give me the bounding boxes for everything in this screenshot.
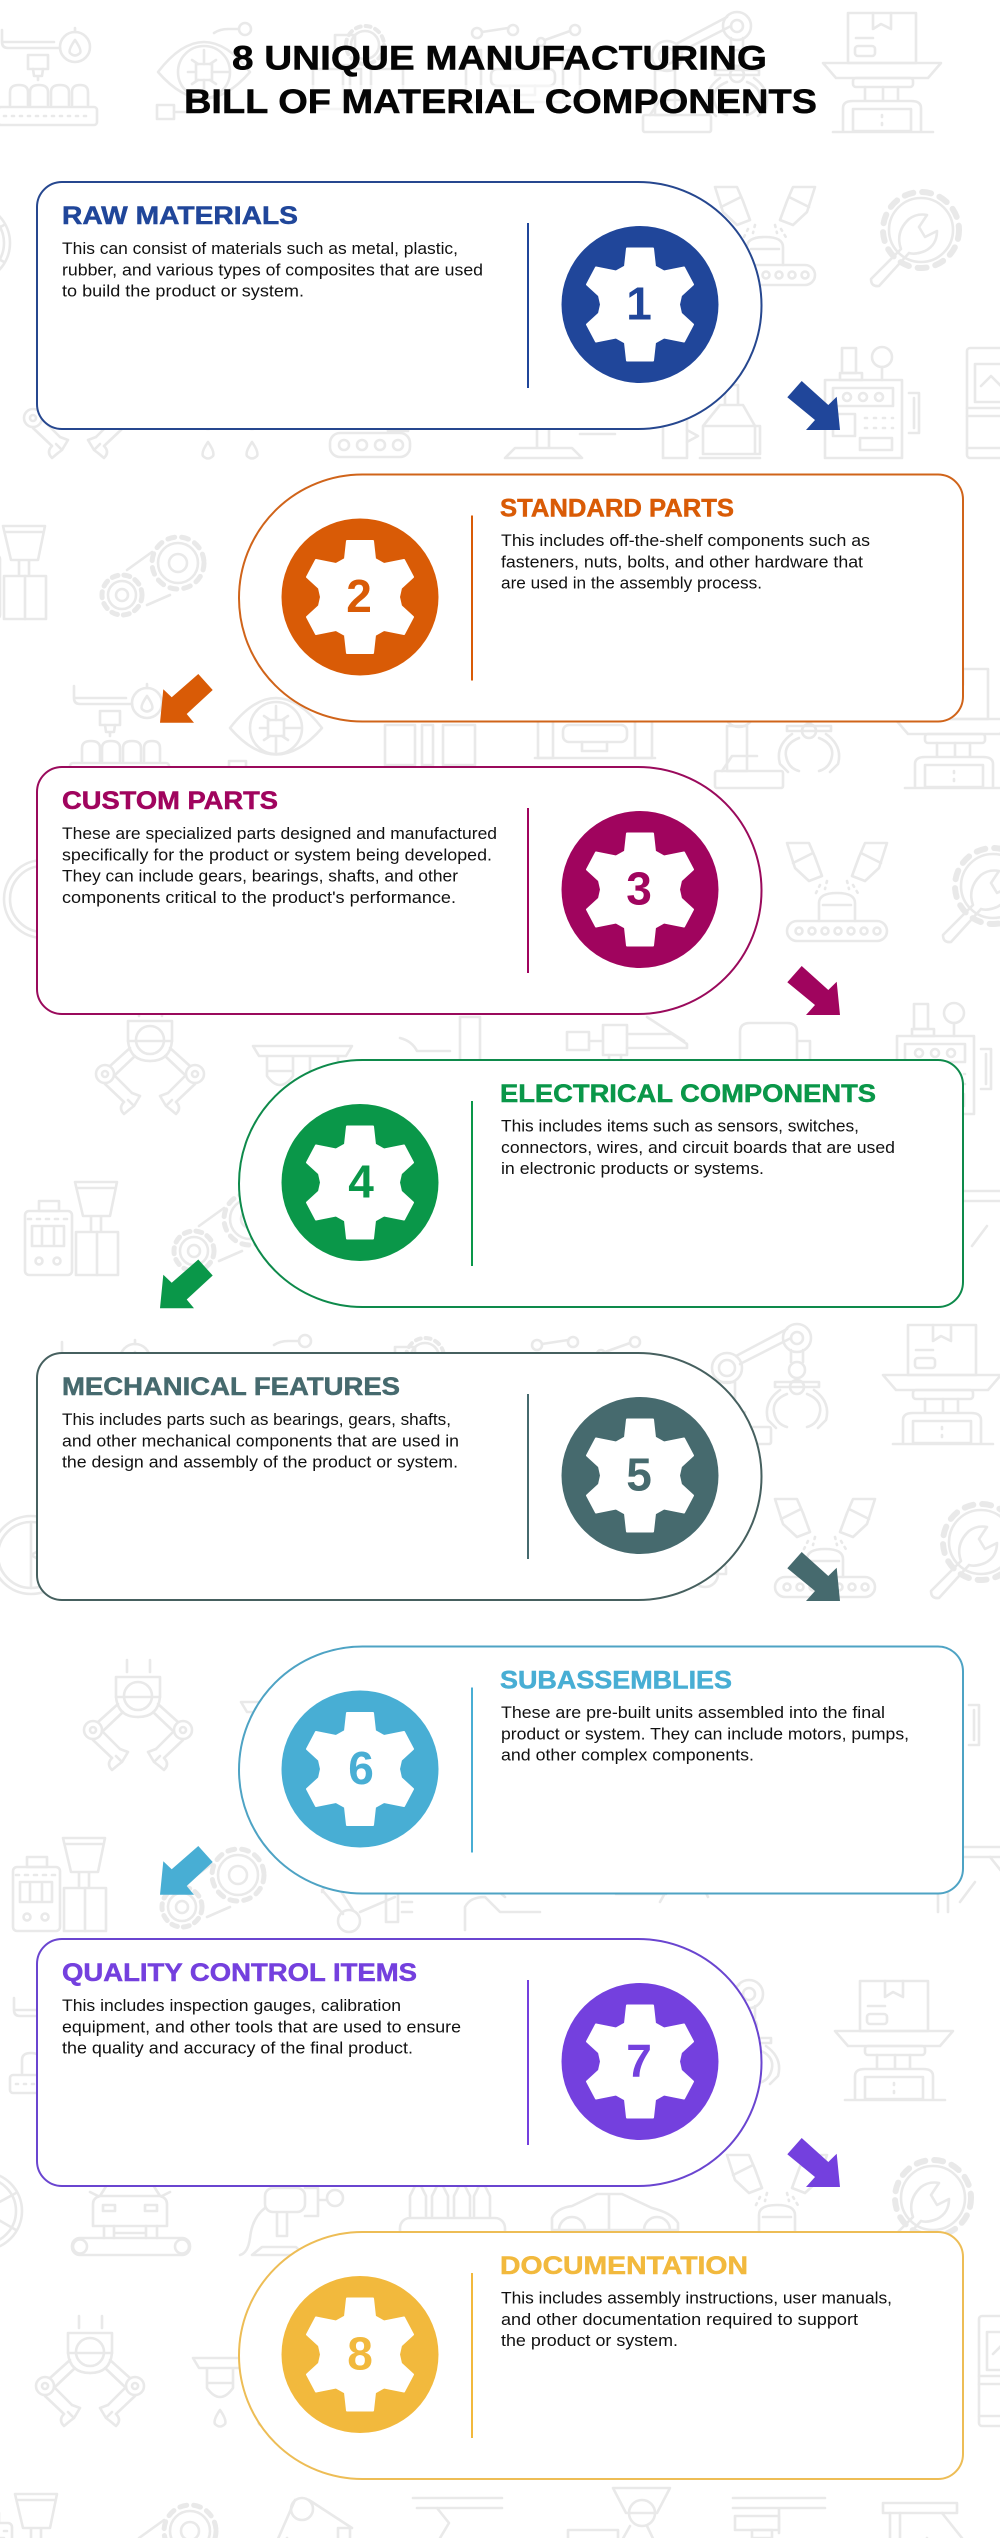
title <box>184 40 817 121</box>
text block: equipment, and other tools that are used to ensure <box>62 2018 461 2036</box>
icon: gear 3 <box>562 811 718 968</box>
icon: gear 8 <box>282 2276 438 2433</box>
text block: specifically for the product or system being developed. <box>62 846 492 864</box>
heading: CUSTOM PARTS <box>62 787 278 815</box>
heading: STANDARD PARTS <box>500 494 734 522</box>
icon: gear 2: 2 <box>346 570 372 622</box>
text block: and other documentation required to support <box>501 2311 859 2329</box>
panel: custom parts <box>37 767 762 1014</box>
text block <box>501 532 870 593</box>
icon: gear 8: 8 <box>347 2328 373 2380</box>
heading: DOCUMENTATION <box>500 2252 748 2280</box>
text block: and other complex components. <box>501 1747 754 1765</box>
heading: RAW MATERIALS <box>62 202 298 230</box>
panel: raw materials <box>37 182 762 429</box>
arrow 1 <box>787 381 840 430</box>
text block: This includes off-the-shelf components such as <box>501 532 870 550</box>
text block <box>62 1997 461 2058</box>
heading: MECHANICAL FEATURES <box>62 1373 400 1401</box>
text block: They can include gears, bearings, shafts, and other <box>62 868 459 886</box>
arrow 6 <box>160 1846 213 1895</box>
text block: in electronic products or systems. <box>501 1160 764 1178</box>
text block: This includes items such as sensors, switches, <box>501 1118 859 1136</box>
panel: mechanical features <box>37 1353 762 1600</box>
text block: This includes inspection gauges, calibration <box>62 1997 401 2015</box>
text block: the design and assembly of the product or system. <box>62 1454 458 1472</box>
text block: the product or system. <box>501 2332 678 2350</box>
icon: gear 2 <box>282 518 438 676</box>
text block <box>501 1118 895 1178</box>
icon: gear 1 <box>562 226 718 383</box>
arrow 7 <box>787 2138 840 2187</box>
icon: gear 4 <box>282 1104 438 1261</box>
text block: to build the product or system. <box>62 283 304 301</box>
text block: fasteners, nuts, bolts, and other hardware that <box>501 553 864 571</box>
text block <box>62 825 497 907</box>
icon: gear 5: 5 <box>626 1448 652 1500</box>
heading: ELECTRICAL COMPONENTS <box>500 1080 876 1108</box>
icon: gear 7: 7 <box>626 2034 652 2086</box>
icon: gear 7 <box>562 1983 718 2140</box>
icon: gear 6: 6 <box>348 1742 374 1794</box>
arrow 2 <box>160 674 213 723</box>
icon: gear 4: 4 <box>348 1156 374 1208</box>
heading: QUALITY CONTROL ITEMS <box>62 1959 417 1987</box>
text block <box>501 2290 892 2350</box>
title: BILL OF MATERIAL COMPONENTS <box>184 83 817 121</box>
text block <box>62 1411 459 1472</box>
arrow 4 <box>160 1260 213 1308</box>
arrow 5 <box>787 1552 840 1601</box>
heading: SUBASSEMBLIES <box>500 1666 732 1694</box>
text block: These are specialized parts designed and manufactured <box>62 825 497 843</box>
icon: gear 1: 1 <box>626 278 652 330</box>
text block: This includes parts such as bearings, gears, shafts, <box>62 1411 451 1429</box>
text block <box>62 240 483 301</box>
text block <box>501 1704 909 1765</box>
text block: connectors, wires, and circuit boards that are used <box>501 1139 895 1157</box>
text block: product or system. They can include motors, pumps, <box>501 1725 909 1743</box>
icon: gear 3: 3 <box>626 862 652 914</box>
text block: This includes assembly instructions, user manuals, <box>501 2290 892 2308</box>
panel: quality control items <box>37 1939 762 2186</box>
text block: components critical to the product's performance. <box>62 889 456 907</box>
arrow 3 <box>787 966 840 1015</box>
text block: the quality and accuracy of the final product. <box>62 2040 413 2058</box>
text block: are used in the assembly process. <box>501 575 762 593</box>
icon: gear 6 <box>282 1690 438 1848</box>
text block: and other mechanical components that are used in <box>62 1432 459 1450</box>
icon: gear 5 <box>562 1397 718 1554</box>
panel: standard parts <box>239 474 963 722</box>
text block: rubber, and various types of composites that are used <box>62 261 483 279</box>
text block: These are pre-built units assembled into the final <box>501 1704 885 1722</box>
panel: electrical components <box>239 1060 963 1307</box>
panel: documentation <box>239 2232 963 2479</box>
text block: This can consist of materials such as metal, plastic, <box>62 240 458 258</box>
title: 8 UNIQUE MANUFACTURING <box>232 40 767 78</box>
panel: subassemblies <box>239 1646 963 1894</box>
